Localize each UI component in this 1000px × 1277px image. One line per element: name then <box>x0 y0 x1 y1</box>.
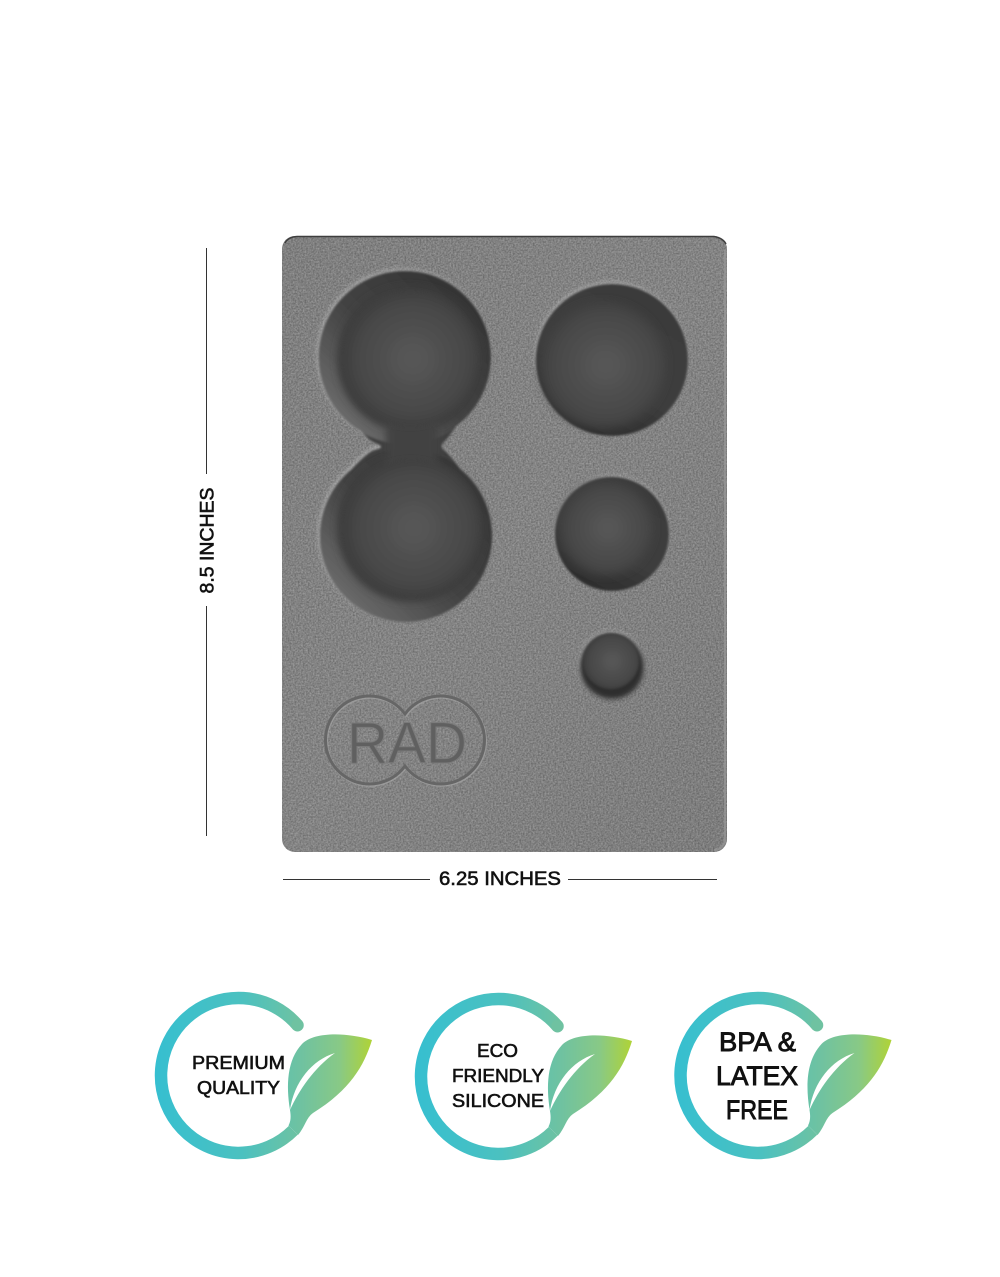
icon: ring and leaf <box>421 999 632 1154</box>
badge: eco friendly silicone: FRIENDLY <box>452 1066 544 1086</box>
cavity: medium circle <box>554 475 669 591</box>
dimension: width: 6.25 INCHES <box>439 868 561 890</box>
dimension: height: 8.5 INCHES <box>196 488 218 594</box>
cavity: double circle <box>310 260 500 630</box>
badge: bpa and latex free <box>681 998 892 1153</box>
badge: eco friendly silicone: SILICONE <box>452 1091 544 1111</box>
badge: eco friendly silicone: ECO <box>477 1041 518 1061</box>
panel: silicone tray <box>282 236 727 852</box>
badge: premium quality: PREMIUM <box>192 1053 285 1073</box>
logo: RAD embossed: RAD <box>347 711 467 776</box>
badge: premium quality: QUALITY <box>197 1078 280 1098</box>
badge: bpa and latex free: BPA & <box>719 1027 796 1057</box>
icon: ring and leaf <box>161 998 372 1153</box>
logo: RAD embossed <box>326 696 485 785</box>
cavity: large circle <box>535 282 688 436</box>
icon: ring and leaf <box>681 998 892 1153</box>
badge: bpa and latex free: LATEX <box>716 1061 798 1091</box>
badge: premium quality <box>161 998 372 1153</box>
badge: eco friendly silicone <box>421 999 632 1154</box>
cavity: small circle <box>578 631 644 699</box>
tray body <box>282 236 727 852</box>
badge: bpa and latex free: FREE <box>726 1095 788 1125</box>
